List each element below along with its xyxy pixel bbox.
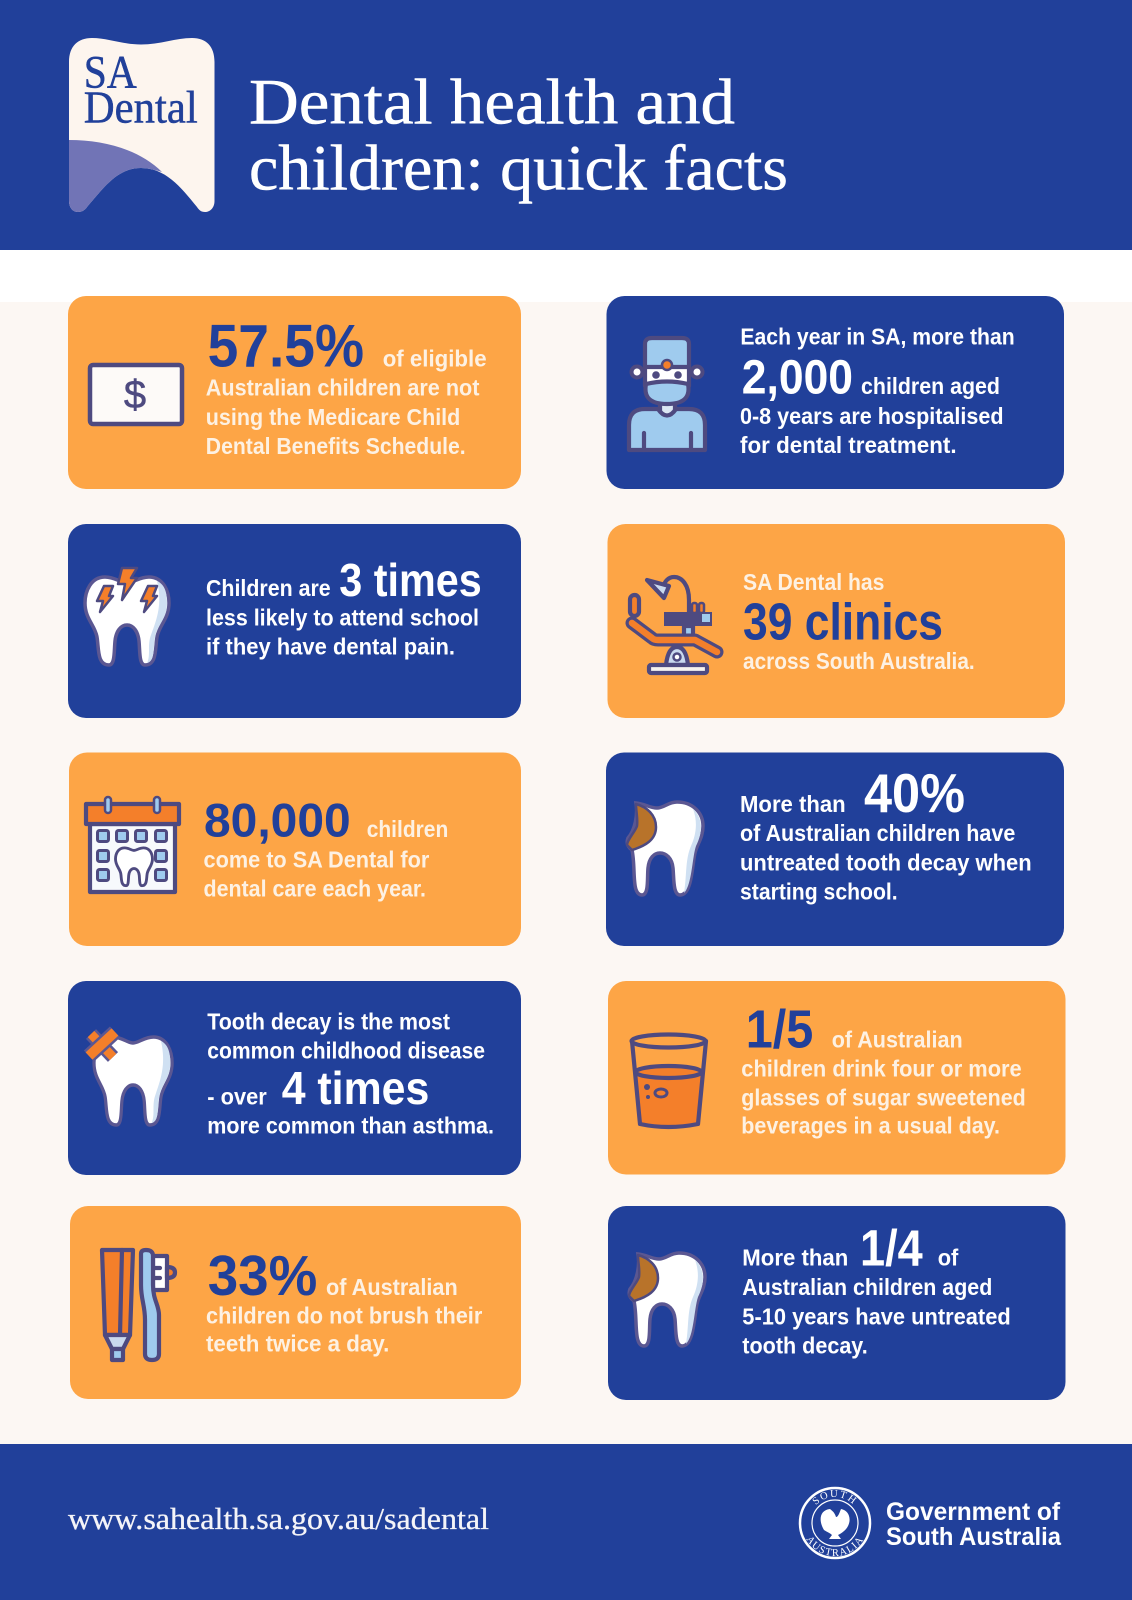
- logo: SA Dental tooth: [69, 38, 214, 212]
- stat text: less likely to attend school: [206, 604, 479, 630]
- stat text: Dental Benefits Schedule.: [206, 433, 466, 459]
- stat text: starting school.: [740, 879, 898, 905]
- stat text: 5-10 years have untreated: [742, 1303, 1011, 1329]
- title: children: quick facts: [249, 132, 788, 204]
- stat text: SA Dental has: [743, 569, 884, 595]
- stat text: glasses of sugar sweetened: [741, 1084, 1026, 1110]
- stat text: 80,000: [204, 794, 351, 847]
- stat text: teeth twice a day.: [206, 1331, 389, 1357]
- stat text: 57.5%: [208, 313, 364, 380]
- panel: 39 clinics: [608, 524, 1065, 718]
- stat text: - over: [207, 1084, 267, 1110]
- stat text: [204, 794, 448, 902]
- stat text: 33%: [208, 1244, 317, 1308]
- stat text: 4 times: [282, 1062, 429, 1114]
- stat text: children do not brush their: [206, 1302, 482, 1328]
- title: Dental health and: [249, 66, 735, 138]
- stat text: beverages in a usual day.: [741, 1112, 1000, 1138]
- icon: dental chair: [630, 577, 717, 673]
- panel: 1/4 untreated decay: [608, 1206, 1066, 1400]
- icon: decayed tooth: [627, 802, 703, 895]
- stat text: 1/4: [860, 1220, 923, 1277]
- stat text: children drink four or more: [741, 1055, 1022, 1081]
- panel: 1/5 sugar sweetened beverages: [608, 981, 1066, 1174]
- stat text: [740, 762, 1032, 905]
- stat text: [743, 569, 975, 674]
- stat text: 39 clinics: [743, 593, 943, 651]
- stat text: tooth decay.: [742, 1333, 868, 1359]
- panel: 33% brushing: [70, 1206, 521, 1399]
- stat text: 2,000: [742, 351, 853, 404]
- stat text: [206, 1244, 482, 1357]
- stat text: of Australian children have: [740, 820, 1015, 846]
- stat text: [742, 1220, 1011, 1359]
- stat text: [206, 554, 482, 660]
- icon: tooth with lightning bolts: [85, 568, 169, 665]
- icon: toothpaste and toothbrush: [102, 1250, 175, 1360]
- stat text: 3 times: [339, 554, 482, 606]
- stat text: of Australian: [326, 1274, 458, 1300]
- stat text: [741, 1000, 1026, 1138]
- stat text: Tooth decay is the most: [207, 1008, 450, 1034]
- stat text: More than: [740, 791, 846, 817]
- stat text: 1/5: [746, 1000, 813, 1060]
- stat text: using the Medicare Child: [206, 404, 460, 430]
- panel: 40% untreated decay: [606, 752, 1064, 946]
- footer banner: [0, 1444, 1132, 1600]
- stat text: across South Australia.: [743, 648, 975, 674]
- stat text: if they have dental pain.: [206, 634, 455, 660]
- stat text: of eligible: [383, 346, 487, 372]
- logo: SA Dental tooth: Dental: [84, 82, 198, 133]
- stat text: more common than asthma.: [207, 1112, 494, 1138]
- emblem: South Australia crest: [798, 1486, 872, 1560]
- stat text: for dental treatment.: [740, 432, 957, 458]
- title: [249, 66, 788, 204]
- icon: tooth with bandage: [89, 1032, 172, 1125]
- icon: banknote with dollar: [90, 365, 182, 424]
- icon: calendar with tooth: [86, 797, 179, 892]
- government wordmark: South Australia: [886, 1523, 1062, 1551]
- stat text: Australian children are not: [206, 375, 480, 401]
- icon: dentist: [629, 338, 705, 450]
- icon: glass of soft drink: [632, 1034, 706, 1127]
- icon: banknote with dollar: $: [124, 373, 146, 417]
- stat text: children aged: [861, 373, 1000, 399]
- stat text: common childhood disease: [207, 1038, 485, 1064]
- stat text: Each year in SA, more than: [740, 323, 1015, 349]
- stat text: dental care each year.: [204, 876, 426, 902]
- stat text: More than: [742, 1245, 848, 1271]
- stat text: 0-8 years are hospitalised: [740, 403, 1004, 429]
- header banner: [0, 0, 1132, 250]
- stat text: Australian children aged: [742, 1274, 992, 1300]
- stat text: Children are: [206, 575, 331, 601]
- logo: SA Dental tooth: SA: [84, 47, 137, 99]
- stat text: [206, 313, 487, 459]
- emblem: South Australia crest: SOUTH: [812, 1490, 857, 1504]
- stat text: [740, 323, 1015, 458]
- government wordmark: Government of: [886, 1498, 1061, 1526]
- stat text: of: [938, 1245, 959, 1271]
- stat text: untreated tooth decay when: [740, 849, 1032, 875]
- icon: decayed tooth: [629, 1253, 705, 1346]
- panel: 2,000 hospitalised: [606, 296, 1064, 489]
- website url: www.sahealth.sa.gov.au/sadental: [68, 1501, 489, 1536]
- emblem: South Australia crest: AUSTRALIA: [806, 1538, 864, 1556]
- panel: 3 times dental pain: [68, 524, 521, 718]
- stat text: 40%: [864, 762, 965, 824]
- stat text: children: [367, 816, 448, 842]
- stat text: of Australian: [832, 1027, 963, 1053]
- panel: 80,000 children: [69, 752, 521, 946]
- stat text: [207, 1008, 494, 1138]
- panel: 57.5% Medicare: [68, 296, 521, 489]
- stat text: come to SA Dental for: [204, 847, 429, 873]
- government wordmark: [886, 1498, 1062, 1551]
- panel: 4 times more common than asthma: [68, 981, 521, 1175]
